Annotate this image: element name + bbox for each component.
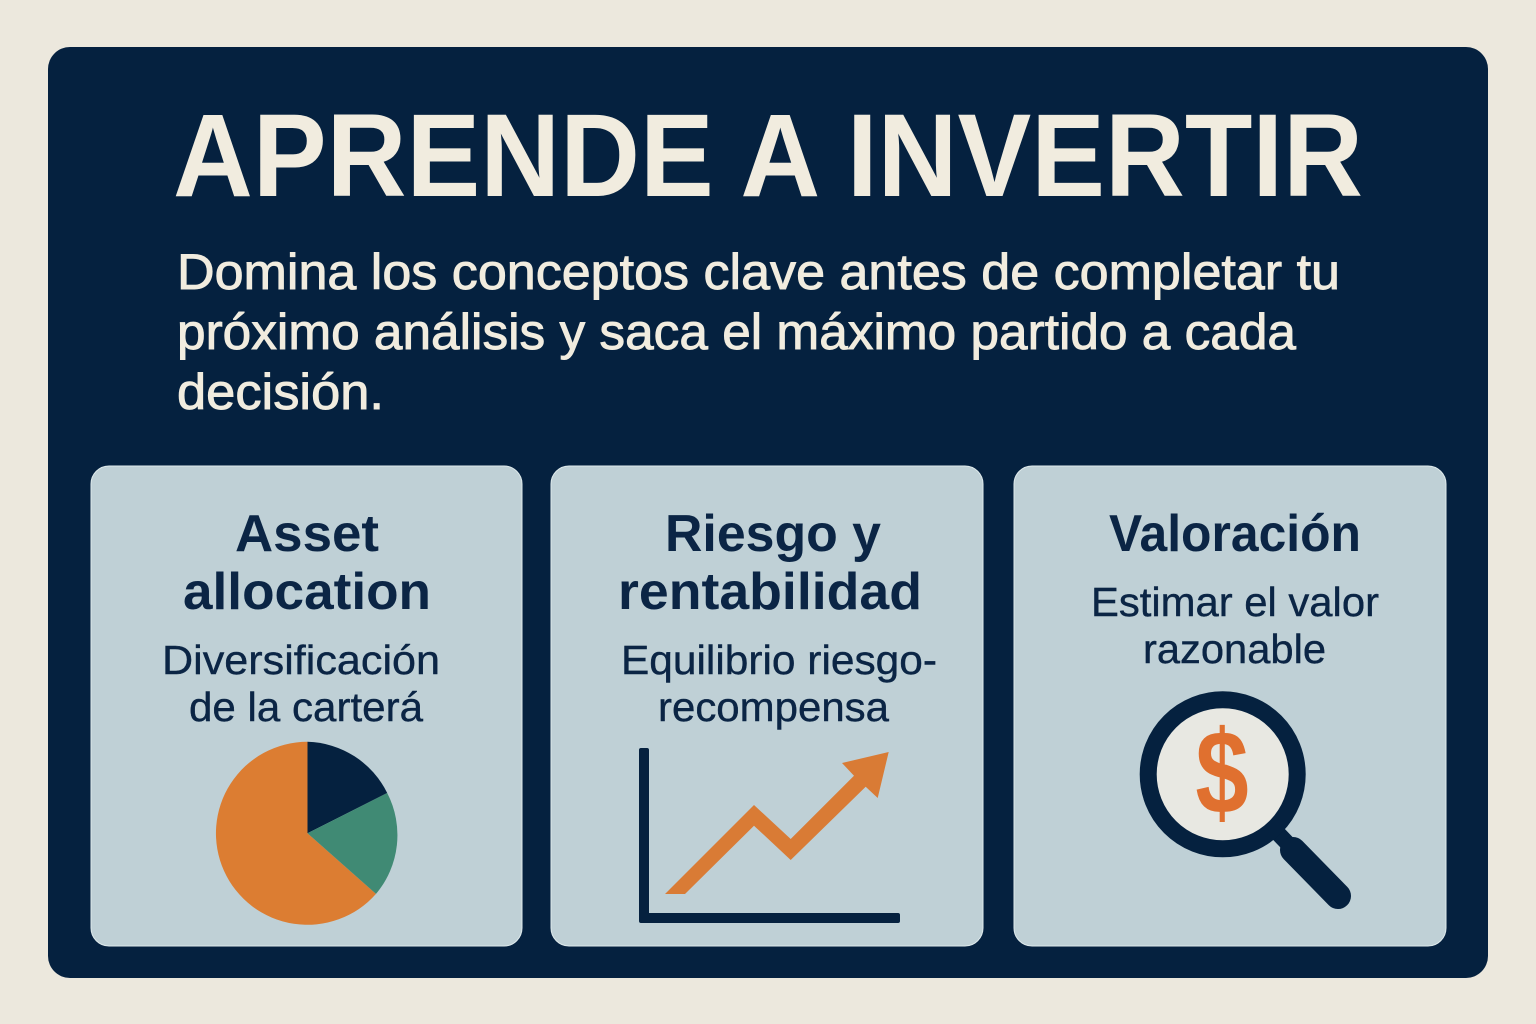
subtitle (177, 244, 1340, 420)
subtitle: decisión. (177, 364, 384, 420)
panel: riesgo y rentabilidad (551, 466, 983, 946)
heading: riesgo y rentabilidad: rentabilidad (618, 563, 922, 621)
heading: asset allocation: Asset (235, 505, 379, 563)
heading: riesgo y rentabilidad: Riesgo y (665, 505, 881, 563)
description: equilibrio riesgo-recompensa (621, 637, 937, 730)
description: estimar el valor razonable: razonable (1143, 626, 1326, 672)
title: APRENDE A INVERTIR (173, 90, 1363, 222)
description: equilibrio riesgo-recompensa: recompensa (658, 684, 889, 730)
subtitle: próximo análisis y saca el máximo partido a cada (177, 304, 1296, 360)
description: estimar el valor razonable (1091, 579, 1379, 672)
description: estimar el valor razonable: Estimar el valor (1091, 579, 1379, 625)
heading: valoración: Valoración (1109, 505, 1361, 563)
icon: line chart with rising arrow (639, 748, 900, 923)
icon: pie chart (216, 742, 397, 925)
description: diversificación (162, 637, 440, 730)
icon: magnifying glass with dollar: $ (1195, 705, 1249, 838)
description: diversificación: de la carterá (189, 684, 423, 730)
icon: magnifying glass with dollar (1148, 700, 1338, 896)
subtitle: Domina los conceptos clave antes de completar tu (177, 244, 1340, 300)
description: diversificación: Diversificación (162, 637, 440, 683)
heading: asset allocation (183, 505, 431, 621)
description: equilibrio riesgo-recompensa: Equilibrio riesgo- (621, 637, 937, 683)
panel: valoración (1014, 466, 1446, 946)
panel: asset allocation (91, 466, 522, 946)
heading: riesgo y rentabilidad (618, 505, 922, 621)
heading: asset allocation: allocation (183, 563, 431, 621)
